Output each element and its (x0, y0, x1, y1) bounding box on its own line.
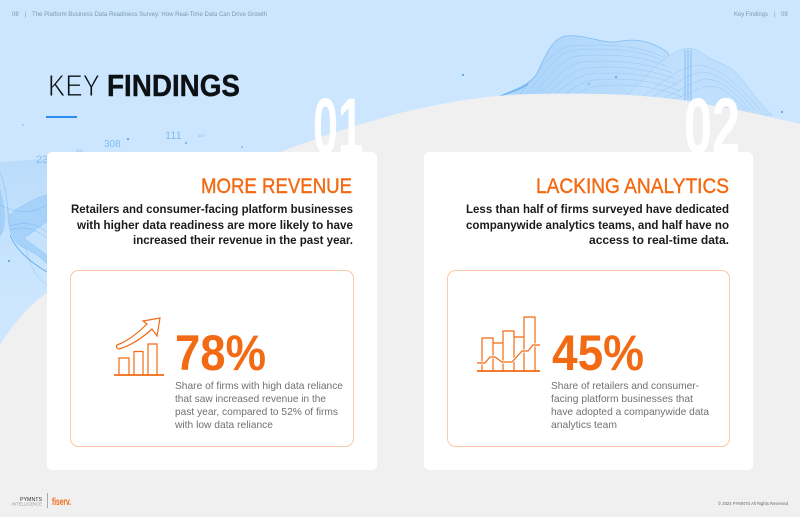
header right: | (774, 12, 776, 18)
header right: 09 (781, 12, 788, 18)
icon: rising bars with arrow (114, 318, 164, 375)
logo: PYMNTS Intelligence and Fiserv: INTELLIGENCE (12, 502, 42, 506)
stat description: Share of retailers and consumer- (551, 380, 699, 392)
stat description (551, 380, 709, 431)
stat: 45%: 45% (552, 325, 644, 381)
stat description: Share of firms with high data reliance (175, 380, 343, 392)
stat description: have adopted a companywide data (551, 406, 709, 418)
number 02: 02 (684, 81, 740, 170)
scattered data numbers and dots: 111 (165, 130, 182, 142)
number 01: 01 (313, 81, 363, 170)
icon: bar chart with trend line (477, 317, 540, 371)
header left: | (24, 12, 26, 18)
stat description: with low data reliance (174, 419, 273, 431)
header left: 08 (12, 12, 19, 18)
heading: lacking analytics: LACKING ANALYTICS (536, 174, 729, 198)
title: FINDINGS (107, 69, 240, 103)
logo: PYMNTS Intelligence and Fiserv: fiserv. (52, 497, 71, 508)
header left: The Platform Business Data Readiness Survey: How Real-Time Data Can Drive Growth (32, 12, 267, 18)
body text: lacking analytics: companywide analytics teams, and half have no (466, 218, 729, 232)
scattered data numbers and dots: 308 (104, 139, 121, 150)
heading: more revenue: MORE REVENUE (201, 174, 352, 198)
title: KEY (48, 69, 100, 103)
header right: Key Findings (734, 12, 768, 18)
mesh wave: left side (0, 159, 47, 293)
panel: more revenue (47, 152, 377, 470)
body text: more revenue: increased their revenue in the past year. (133, 233, 353, 247)
body text: lacking analytics: access to real-time data. (589, 233, 729, 247)
body text: more revenue: with higher data readiness are more likely to have (76, 218, 353, 232)
logo: PYMNTS Intelligence and Fiserv: PYMNTS (20, 497, 42, 503)
stat box: 78% (70, 270, 354, 446)
stat description (174, 380, 343, 431)
stat box: 45% (448, 270, 730, 446)
body text: lacking analytics: Less than half of firms surveyed have dedicated (466, 202, 729, 216)
mesh wave: top right (500, 36, 772, 115)
stat: 78%: 78% (175, 325, 266, 381)
header right (734, 12, 788, 18)
body text: lacking analytics (466, 202, 729, 247)
title (48, 69, 240, 103)
scattered data numbers and dots: 300 (76, 148, 83, 153)
body text: more revenue (71, 202, 353, 247)
stat description: that saw increased revenue in the (175, 393, 326, 405)
scattered data numbers and dots: 23 (36, 154, 48, 166)
stat description: analytics team (551, 419, 617, 431)
body text: more revenue: Retailers and consumer-facing platform businesses (71, 202, 353, 216)
footer copyright: © 2024 PYMNTS All Rights Reserved (718, 500, 788, 506)
scattered data numbers and dots (8, 74, 783, 262)
scattered data numbers and dots: 300 (198, 133, 205, 138)
stat description: facing platform businesses that (551, 393, 693, 405)
panel: lacking analytics (424, 152, 753, 470)
title underline (46, 116, 77, 118)
logo: PYMNTS Intelligence and Fiserv (12, 493, 71, 508)
stat description: past year, compared to 52% of firms (175, 406, 338, 418)
